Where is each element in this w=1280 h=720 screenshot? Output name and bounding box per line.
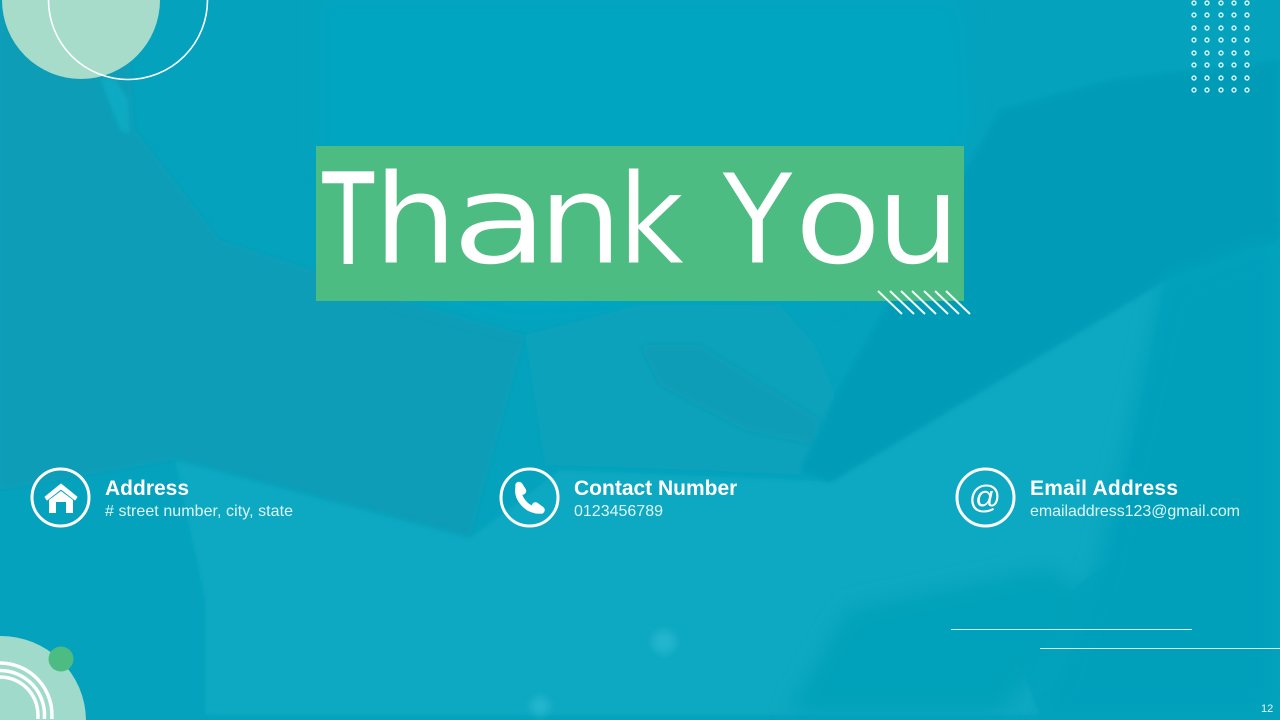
address label and text: Address [105, 477, 189, 500]
title: Thank You on green block: T [323, 148, 373, 293]
address label and text [105, 477, 293, 520]
address label and text: # street number, city, state [105, 503, 293, 520]
email label and address: Email Address [1030, 477, 1178, 500]
page number: 12 [1261, 703, 1273, 715]
title: Thank You on green block: h [373, 148, 457, 293]
email label and address: emailaddress123@gmail.com [1030, 503, 1240, 520]
decoration: top-left circles [2, 0, 208, 80]
icon: telephone [501, 469, 558, 526]
decoration: dot grid [1192, 1, 1249, 92]
decoration: bottom-left circle with rings [0, 636, 86, 720]
title: Thank You on green block: k [618, 148, 684, 293]
phone label and number [574, 477, 737, 520]
icon: at sign [957, 469, 1014, 526]
decoration: diagonal hatch lines [877, 290, 971, 315]
title: Thank You on green block: a [451, 148, 549, 293]
email label and address [1030, 477, 1240, 520]
title: Thank You on green block [316, 146, 964, 301]
title: Thank You on green block: Y [722, 148, 793, 293]
contact: email [957, 469, 1240, 526]
phone label and number: Contact Number [574, 477, 737, 500]
title: Thank You on green block: n [538, 148, 623, 293]
contact: phone [501, 469, 737, 526]
title: Thank You on green block: u [876, 148, 961, 293]
phone label and number: 0123456789 [574, 503, 663, 520]
decoration: horizontal lines [951, 630, 1280, 648]
title: Thank You on green block: o [794, 148, 882, 293]
contact: address [32, 469, 293, 526]
icon: at sign: @ [969, 479, 1001, 515]
icon: house [32, 469, 89, 526]
